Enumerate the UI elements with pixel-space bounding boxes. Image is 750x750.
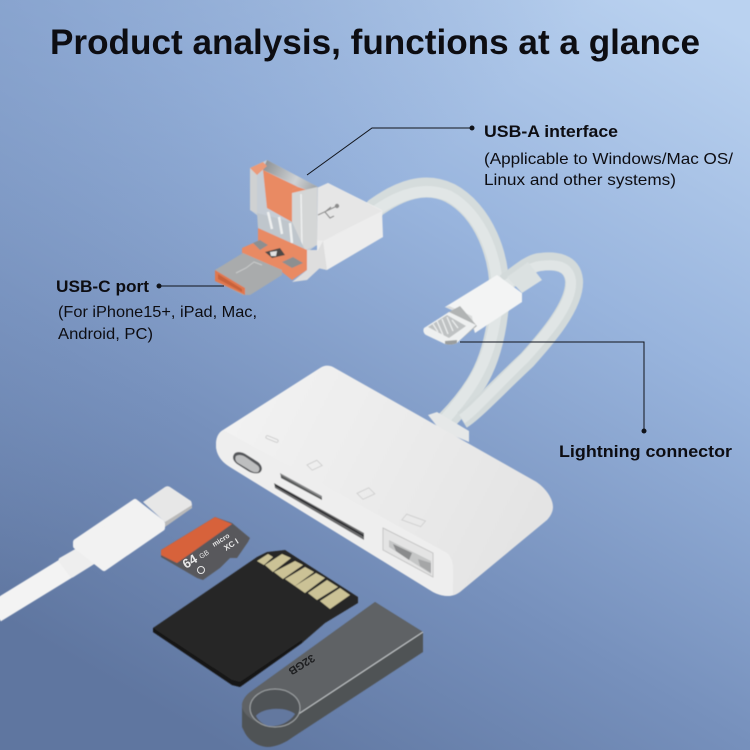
USB logo [318,206,337,218]
USB-A port [383,528,433,577]
callout: USB-C port [56,277,257,343]
clear hinge [257,213,305,250]
label description: (Applicable to Windows/Mac OS/ [484,151,734,168]
callout: USB-C port: Android, PC) [58,326,153,343]
key ring hole [250,689,300,727]
label heading: Lightning connector [559,442,732,461]
microSD capacity text: GB [198,549,211,561]
card body [153,550,358,687]
orange label [161,517,232,563]
white housing [317,183,383,270]
cable collar [428,412,469,442]
SD card [153,550,358,687]
hub body [216,366,553,596]
orange inner plate [263,170,298,222]
microSD capacity text: 64 [180,551,201,572]
callout: Lightning connector [460,342,732,461]
label description: (For iPhone15+, iPad, Mac, [58,304,257,321]
flip cap [250,160,318,252]
microSD capacity text: micro [211,533,231,549]
label heading: USB-C port [56,277,149,296]
port icons [265,435,425,527]
metal plug [143,486,192,525]
leader line [460,342,644,431]
microSD capacity text: XC I [222,537,240,553]
housing [76,502,162,568]
lightning connector [423,275,522,345]
USB-A metal plug [215,253,282,295]
microSD card [161,517,250,580]
strain relief [507,262,542,293]
leader line [159,285,224,287]
callout: USB-A interface [307,122,734,189]
connector tip [423,312,476,345]
connector housing [445,275,522,333]
USB flash drive [242,602,423,747]
micro SD slot [280,473,322,500]
USB-C cable [0,486,192,612]
SD slot [274,483,364,540]
microSD capacity text [180,533,240,574]
front-right wall [292,187,317,250]
card body [161,517,250,580]
leader line [307,128,472,175]
drive top face [242,602,423,725]
connector metal neck [447,306,477,340]
lightning cable [462,261,574,420]
connector contacts [428,315,466,338]
strain relief [61,548,96,575]
gold contacts [257,554,350,609]
orange base [242,228,307,280]
label heading: USB-A interface [484,122,618,141]
USB dual connector [215,160,383,295]
drive side [242,602,423,747]
USB-C port [233,452,262,473]
flash drive capacity text: 32GB [286,651,317,677]
callout: USB-A interface: Linux and other systems) [484,172,676,189]
adapter hub [216,366,553,596]
USB cable [375,188,499,420]
hub front face [216,430,453,596]
cable [0,566,70,612]
title: Product analysis, functions at a glance [50,23,700,62]
